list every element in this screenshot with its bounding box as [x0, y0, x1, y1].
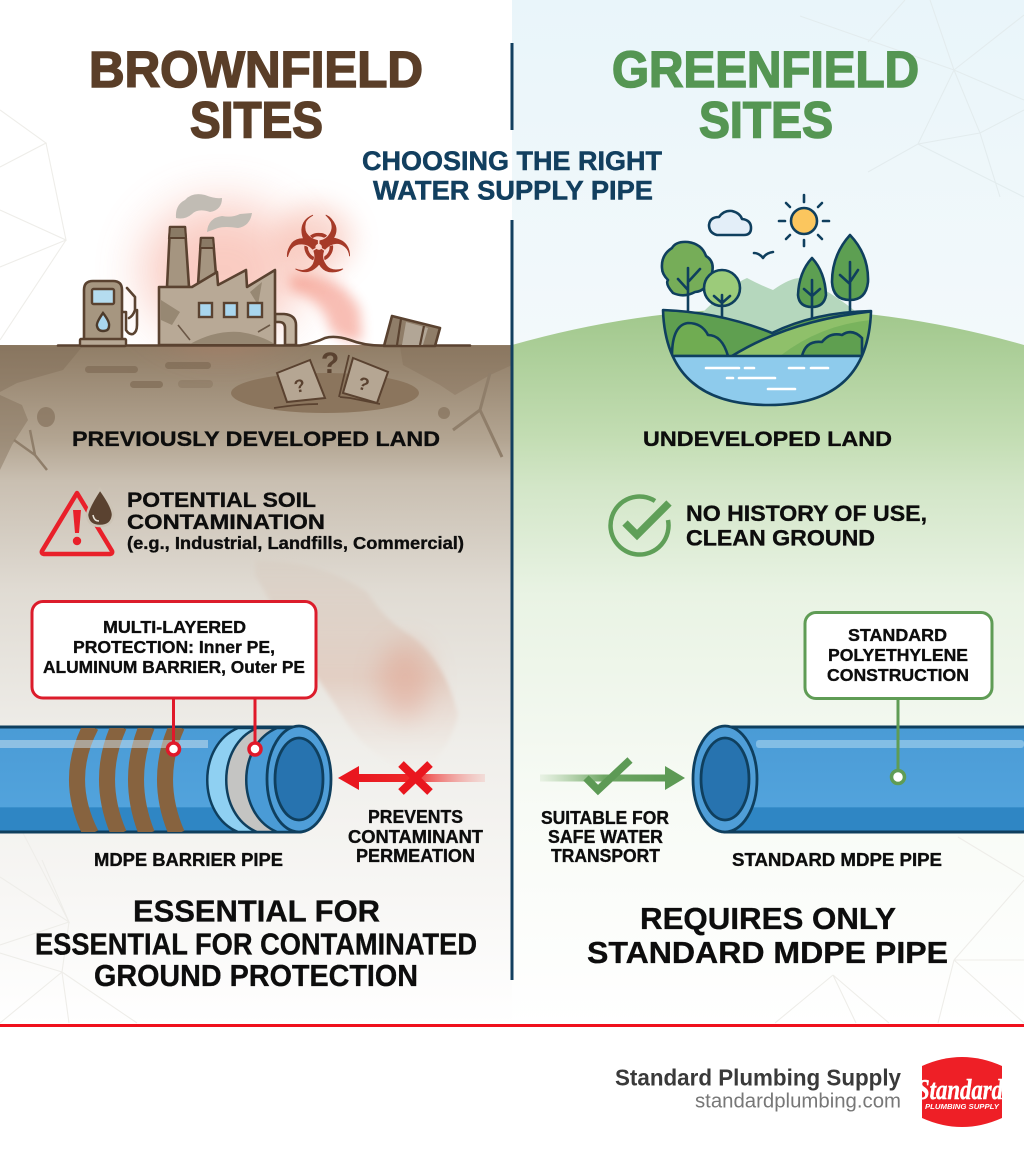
illustration: clean greenfield landscape — [660, 195, 875, 410]
ground line — [58, 337, 470, 346]
callout: multi-layered protection: PROTECTION: Inner PE, — [73, 637, 275, 657]
icon: cloud — [709, 211, 751, 235]
brown bands — [77, 726, 177, 834]
panel: brownfield background — [0, 0, 512, 1025]
callout: standard polyethylene construction — [805, 612, 992, 784]
label: standard mdpe pipe: STANDARD MDPE PIPE — [732, 850, 942, 870]
conclusion: greenfield: STANDARD MDPE PIPE — [587, 935, 948, 970]
puddle with buried barrels: ? — [292, 375, 307, 397]
text: potential soil contamination: CONTAMINATION — [127, 511, 325, 534]
icon: landscape bowl — [660, 305, 875, 410]
main heading: WATER SUPPLY PIPE — [373, 176, 653, 206]
title: brownfield sites: BROWNFIELD — [89, 41, 423, 98]
footer band — [0, 1024, 1024, 1154]
arrow: suitable flow — [540, 760, 685, 790]
illustration: contaminated brownfield site — [58, 194, 470, 413]
conclusion: brownfield: ESSENTIAL FOR — [133, 894, 380, 928]
callout: multi-layered protection: ALUMINUM BARRIER, Outer PE — [43, 657, 305, 677]
puddle with buried barrels: ? — [321, 347, 339, 380]
text: no history of use: NO HISTORY OF USE, — [686, 501, 927, 526]
callout: standard polyethylene construction: STANDARD — [848, 625, 947, 645]
footer: company name and url: Standard Plumbing Supply — [615, 1064, 901, 1090]
panel: greenfield background — [512, 0, 1024, 1025]
text: suitable for safe water transport: SAFE WATER — [548, 827, 663, 847]
icon: warning triangle with oil drop — [42, 489, 113, 554]
text: potential soil contamination: POTENTIAL SOIL — [127, 489, 316, 512]
illustration: standard MDPE pipe — [693, 726, 1024, 832]
title: greenfield sites — [612, 41, 919, 148]
callout: standard polyethylene construction: POLYETHYLENE — [828, 645, 968, 665]
text: potential soil contamination — [127, 489, 464, 553]
icon: sun — [779, 195, 829, 246]
icon: smoke — [176, 194, 252, 232]
soil streaks — [85, 362, 213, 388]
text: no history of use — [686, 501, 927, 550]
puddle with buried barrels — [231, 347, 419, 413]
icon: tipped barrel — [384, 316, 440, 346]
logo: standard plumbing supply: PLUMBING SUPPLY — [925, 1102, 1000, 1111]
illustration: MDPE barrier pipe — [0, 726, 331, 834]
puddle with buried barrels: ? — [356, 373, 372, 395]
arrow: blocked contaminant — [338, 764, 485, 792]
trees — [662, 235, 868, 318]
text: no history of use: CLEAN GROUND — [686, 526, 875, 550]
icon: factory — [159, 227, 296, 345]
text: potential soil contamination: (e.g., Industrial, Landfills, Commercial) — [127, 533, 464, 553]
label: mdpe barrier pipe: MDPE BARRIER PIPE — [94, 850, 283, 870]
text: prevents contaminant permeation: PERMEATION — [356, 846, 475, 866]
label: previously developed land: PREVIOUSLY DEVELOPED LAND — [72, 427, 440, 451]
text: prevents contaminant permeation — [348, 807, 483, 866]
text: suitable for safe water transport — [541, 808, 669, 866]
callout: multi-layered protection: MULTI-LAYERED — [103, 617, 246, 637]
callout: multi-layered protection — [32, 602, 316, 755]
main heading: CHOOSING THE RIGHT — [362, 146, 662, 176]
text: suitable for safe water transport: SUITABLE FOR — [541, 808, 669, 828]
conclusion: brownfield — [35, 894, 477, 993]
conclusion: greenfield: REQUIRES ONLY — [640, 901, 896, 936]
footer: company name and url — [615, 1064, 901, 1112]
central divider — [510, 43, 514, 980]
title: brownfield sites — [89, 41, 423, 148]
icon: green check circle — [611, 497, 669, 555]
mountains — [700, 278, 860, 337]
label: undeveloped land: UNDEVELOPED LAND — [643, 427, 892, 451]
icon: biohazard: ☣ — [284, 201, 353, 291]
text: prevents contaminant permeation: PREVENTS — [368, 807, 463, 827]
conclusion: brownfield: GROUND PROTECTION — [94, 958, 418, 993]
footer: company name and url: standardplumbing.com — [695, 1090, 901, 1112]
pipe layers — [207, 728, 262, 832]
text: suitable for safe water transport: TRANSPORT — [551, 846, 660, 866]
conclusion: greenfield — [587, 901, 948, 970]
title: greenfield sites: GREENFIELD — [612, 41, 919, 98]
logo: standard plumbing supply: Standard — [917, 1074, 1003, 1106]
text: prevents contaminant permeation: CONTAMINANT — [348, 827, 483, 847]
logo: standard plumbing supply — [917, 1057, 1003, 1127]
main heading — [362, 146, 662, 206]
icon: fuel pump — [80, 281, 137, 346]
icon: bird — [754, 252, 773, 258]
conclusion: brownfield: ESSENTIAL FOR CONTAMINATED — [35, 926, 477, 962]
callout: standard polyethylene construction: CONSTRUCTION — [827, 665, 969, 685]
title: greenfield sites: SITES — [699, 92, 833, 148]
title: brownfield sites: SITES — [190, 92, 323, 148]
